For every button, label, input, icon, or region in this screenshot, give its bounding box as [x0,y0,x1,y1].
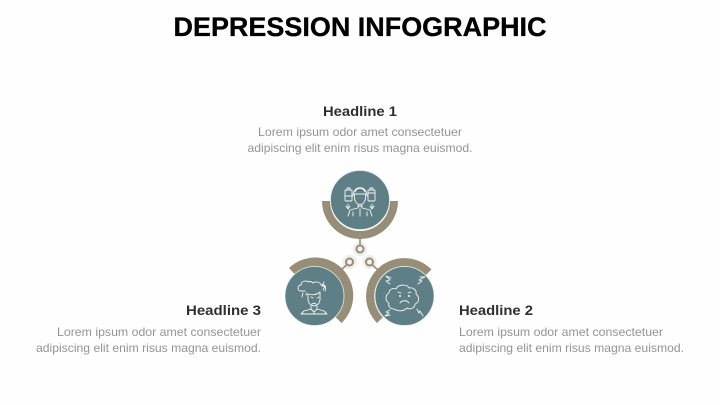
text block: headline 3: Lorem ipsum odor amet consectetuer [57,325,261,339]
text block: headline 1: Headline 1 [323,103,397,119]
node: left [285,258,353,326]
icon: person with batteries [345,188,375,216]
text block: headline 1: adipiscing elit enim risus magna euismod. [248,141,472,155]
text block: headline 3: adipiscing elit enim risus magna euismod. [36,341,261,355]
arc: left [289,258,353,323]
text block: headline 2: Lorem ipsum odor amet consectetuer [459,325,663,339]
node: top [322,170,398,239]
connector: left [340,255,356,271]
circle: left [285,266,344,326]
circle: right [375,266,434,326]
connector: right [362,255,379,271]
text block: headline 2: adipiscing elit enim risus magna euismod. [459,341,684,355]
arc: top [322,201,398,239]
text block: headline 1 [248,103,472,155]
text block: headline 1: Lorem ipsum odor amet consectetuer [258,125,462,139]
icon: person with storm cloud [298,281,327,314]
text block: headline 3 [36,302,261,355]
connector: top [353,236,367,256]
circle: top [330,170,390,230]
icon: sad cloud [385,276,425,316]
text block: headline 2: Headline 2 [459,302,533,318]
title: DEPRESSION INFOGRAPHIC [174,12,546,42]
text block: headline 3: Headline 3 [186,302,261,318]
node: right [366,258,434,326]
arc: right [366,258,432,323]
text block: headline 2 [459,302,684,355]
